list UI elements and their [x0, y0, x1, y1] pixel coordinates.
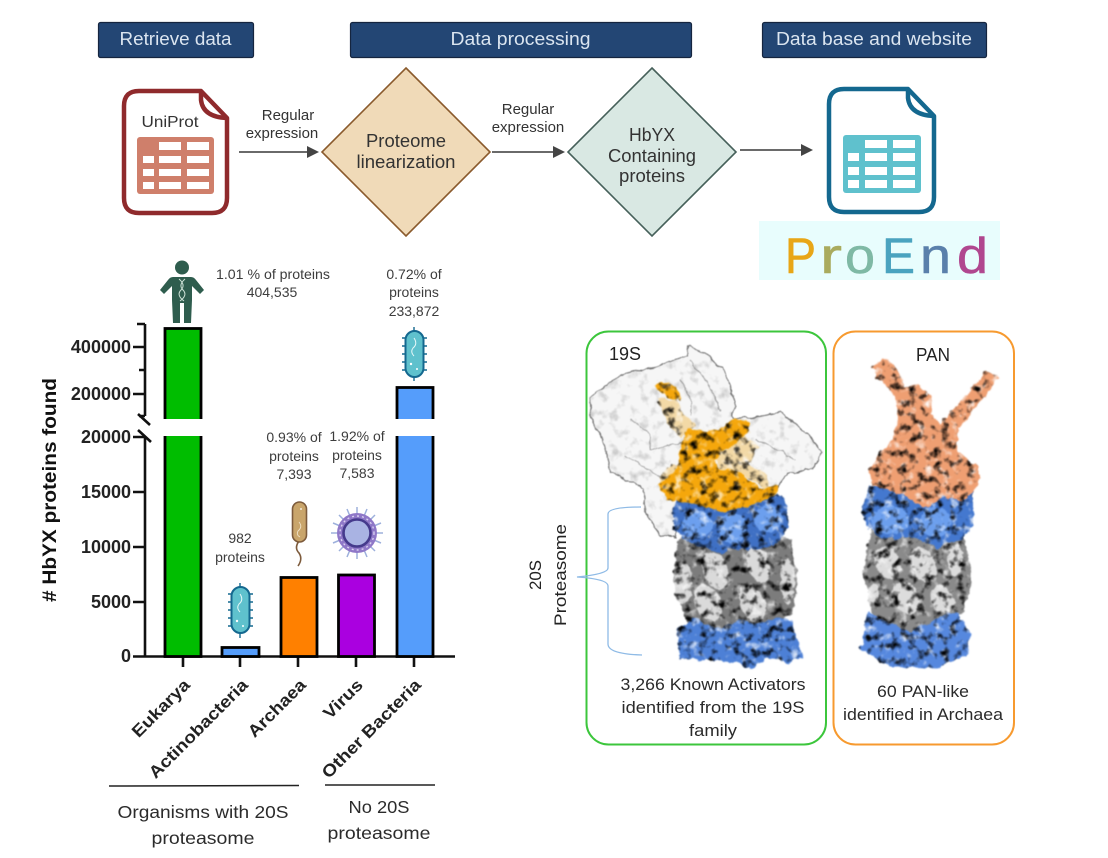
diamond: HbYX Containing proteins: HbYX [629, 125, 675, 145]
caption: 3,266 known activators: identified from the 19S [622, 698, 804, 717]
annotation: Archaea count [266, 429, 322, 482]
bar: Virus [338, 575, 374, 656]
label: 20S Proteasome: 20S [526, 560, 545, 590]
label: Regular expression 2: expression [492, 119, 564, 136]
heading: 19S: 19S [609, 344, 641, 364]
logo: ProEnd: d [957, 228, 988, 284]
label: 20S Proteasome [526, 524, 570, 626]
header: Data processing: Data processing [450, 29, 590, 49]
x axis category labels: Other Bacteria [318, 675, 425, 782]
arrow: linearization to HbYX [492, 146, 565, 158]
icon: archaeon [292, 502, 306, 566]
caption: 3,266 known activators [620, 675, 806, 740]
divider and label: organisms with 20S proteasome [109, 786, 299, 848]
header: Data processing [350, 22, 692, 58]
y axis tick labels: 0 [121, 646, 131, 666]
annotation: Virus count [329, 428, 385, 481]
y axis tick labels: 400000 [71, 337, 131, 357]
y axis title: # HbYX proteins found [40, 378, 61, 602]
bar: Actinobacteria [222, 648, 259, 656]
header: Retrieve data: Retrieve data [120, 29, 233, 49]
x axis category labels: Eukarya [128, 675, 194, 741]
bracket: 20S proteasome [577, 507, 642, 655]
bar chart: HbYX proteins by organism [40, 324, 455, 782]
label: 20S Proteasome: Proteasome [551, 524, 570, 626]
annotation: Actinobacteria count [215, 530, 265, 565]
y axis tick labels: 10000 [81, 537, 131, 557]
arrow: UniProt to linearization [239, 146, 319, 158]
annotation: Actinobacteria count: 982 [228, 530, 252, 546]
diamond: Proteome linearization [322, 68, 490, 236]
caption: 60 PAN-like: identified in Archaea [843, 705, 1004, 724]
divider and label: organisms with 20S proteasome: Organisms with 20S [118, 802, 288, 822]
divider and label: organisms with 20S proteasome: proteasome [152, 828, 254, 848]
y axis and ticks [133, 324, 455, 667]
diamond: Proteome linearization: linearization [356, 152, 456, 172]
divider and label: no 20S proteasome [325, 785, 435, 843]
divider and label: no 20S proteasome: No 20S [348, 797, 410, 817]
annotation: Other Bacteria count: proteins [389, 284, 439, 300]
caption: 60 PAN-like: 60 PAN-like [877, 682, 969, 701]
icon: bacterium (actinobacteria) [228, 583, 253, 638]
annotation: Virus count: 7,583 [339, 465, 375, 481]
icon: human [160, 260, 204, 323]
y axis tick labels: 5000 [91, 592, 131, 612]
x axis category labels [128, 675, 425, 782]
annotation: Virus count: 1.92% of [329, 428, 385, 444]
annotation: Virus count: proteins [332, 447, 382, 463]
heading: PAN: PAN [916, 345, 950, 365]
icon: UniProt document [124, 91, 227, 213]
icon: database document [829, 89, 934, 212]
caption: 3,266 known activators: 3,266 Known Activators [620, 675, 806, 694]
caption: 60 PAN-like [843, 682, 1004, 724]
annotation: Actinobacteria count: proteins [215, 549, 265, 565]
diamond: HbYX Containing proteins [568, 68, 736, 236]
annotation: Other Bacteria count: 0.72% of [386, 266, 442, 282]
structure: PAN with 20S [860, 358, 998, 668]
annotation: Archaea count: 7,393 [276, 466, 312, 482]
diamond: Proteome linearization: Proteome [366, 131, 446, 151]
structure: 19S proteasome [590, 346, 822, 670]
arrow: HbYX to database [740, 144, 813, 156]
logo: ProEnd: E [882, 228, 915, 284]
x axis category labels: Archaea [244, 675, 310, 741]
icon: UniProt document: UniProt [142, 114, 199, 131]
bar: Eukarya [160, 328, 206, 656]
annotation: Archaea count: 0.93% of [266, 429, 322, 445]
y axis tick labels: 200000 [71, 384, 131, 404]
icon: bacterium (other bacteria) [402, 327, 427, 381]
y axis tick labels [71, 337, 131, 666]
logo: ProEnd: n [920, 228, 951, 284]
y axis tick labels: 20000 [81, 427, 131, 447]
y axis tick labels: 15000 [81, 482, 131, 502]
bar: Archaea [281, 578, 317, 656]
logo: ProEnd: r [820, 228, 842, 284]
annotation: Eukarya count [216, 266, 330, 300]
panel: PAN activator [834, 332, 1014, 744]
annotation: Other Bacteria count: 233,872 [389, 303, 440, 319]
icon: virus [331, 507, 383, 559]
header: Data base and website: Data base and website [776, 29, 972, 49]
logo: ProEnd: P [785, 228, 816, 284]
header: Retrieve data [98, 22, 254, 58]
diamond: HbYX Containing proteins: Containing [608, 146, 696, 166]
logo: ProEnd: o [845, 228, 875, 284]
annotation: Other Bacteria count [386, 266, 442, 319]
caption: 3,266 known activators: family [689, 721, 738, 740]
diamond: HbYX Containing proteins: proteins [619, 166, 685, 186]
annotation: Archaea count: proteins [269, 448, 319, 464]
label: Regular expression 1: Regular [262, 107, 314, 124]
logo: ProEnd [759, 221, 1000, 284]
bar: Other Bacteria [392, 388, 438, 656]
label: Regular expression 1: expression [246, 125, 318, 142]
panel: 19S activator [577, 332, 826, 744]
x axis category labels: Actinobacteria [145, 675, 252, 782]
header: Data base and website [762, 22, 986, 58]
divider and label: no 20S proteasome: proteasome [328, 823, 430, 843]
annotation: Eukarya count: 1.01 % of proteins [216, 266, 330, 282]
x axis category labels: Virus [319, 675, 367, 723]
annotation: Eukarya count: 404,535 [247, 284, 298, 300]
label: Regular expression 2: Regular [502, 101, 554, 118]
